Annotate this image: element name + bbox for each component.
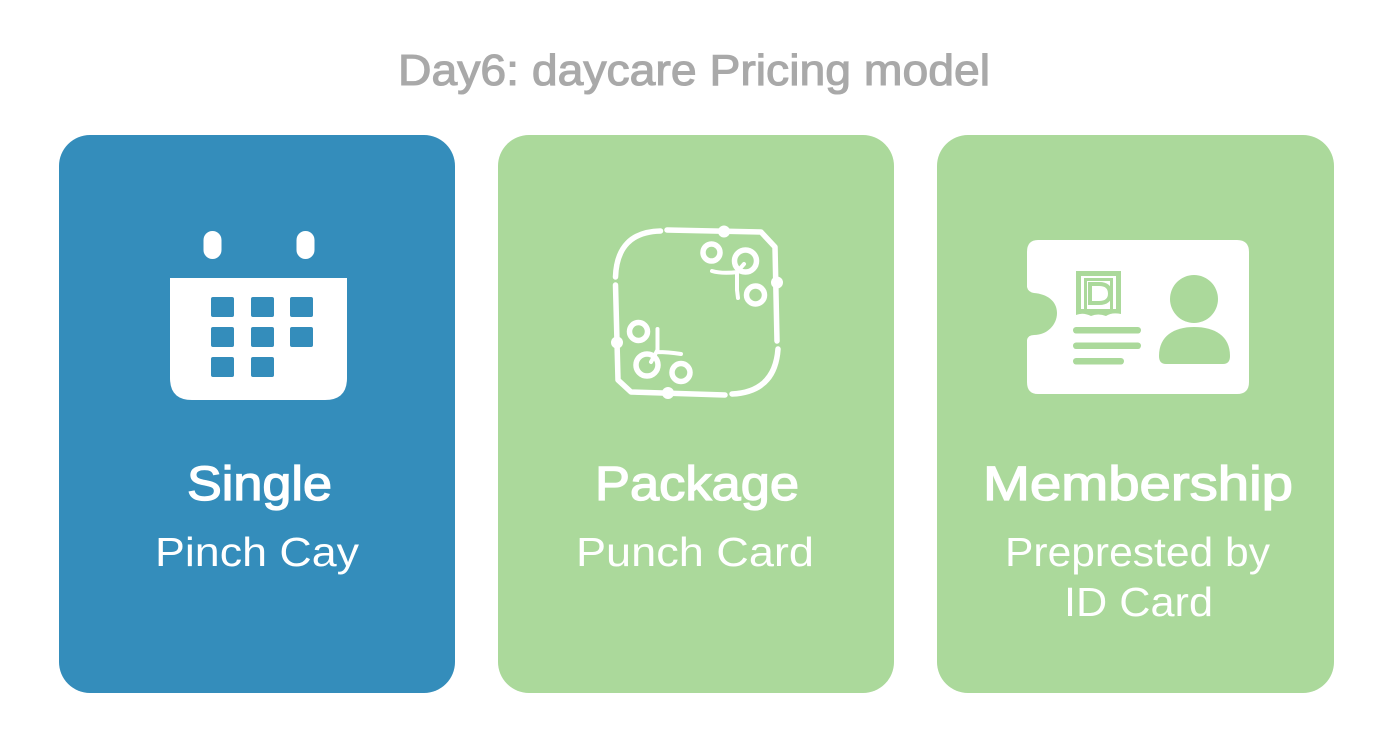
heading: single: Single (187, 458, 332, 511)
card background: membership (937, 135, 1334, 693)
subheading: membership line 1: Preprested by (1005, 529, 1271, 575)
heading: package: Package (595, 458, 799, 511)
title: Day6: daycare Pricing model (398, 46, 990, 95)
icon: calendar (170, 231, 347, 400)
icon: ID card (1027, 240, 1249, 394)
subheading: package: Punch Card (576, 529, 814, 575)
card background: package (498, 135, 894, 693)
card background: single (59, 135, 455, 693)
subheading: membership line 2: ID Card (1064, 579, 1213, 625)
heading: membership: Membership (983, 458, 1293, 511)
panel: package (498, 135, 894, 693)
panel: single (59, 135, 455, 693)
subheading: single: Pinch Cay (155, 529, 360, 575)
panel: membership (937, 135, 1334, 693)
icon: punch card (611, 226, 783, 399)
